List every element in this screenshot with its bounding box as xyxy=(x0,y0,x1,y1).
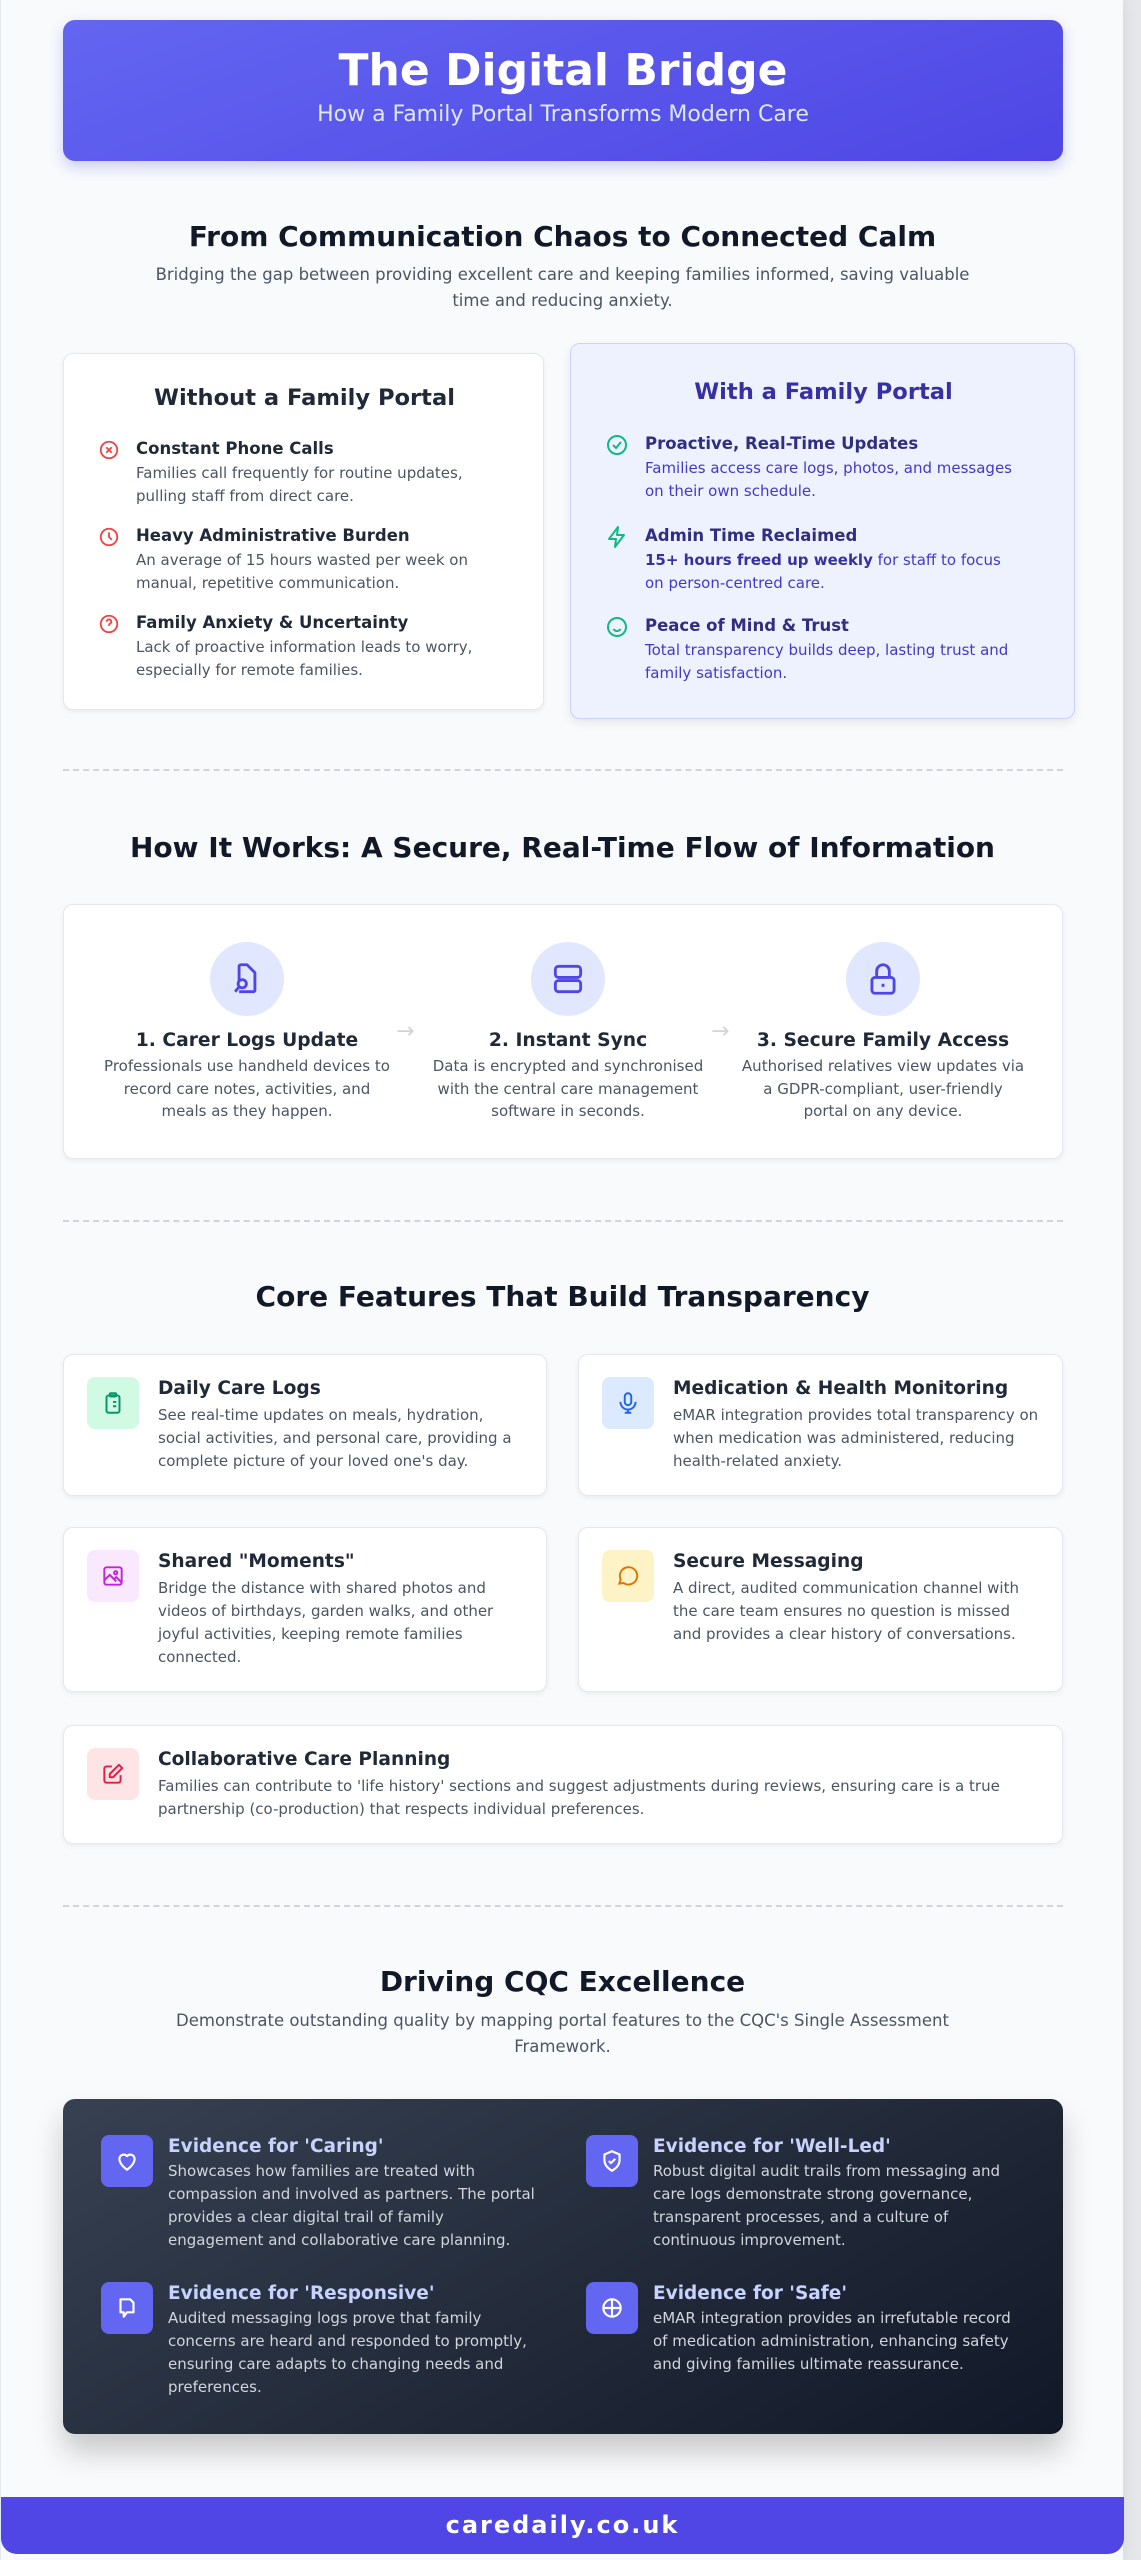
step 2 xyxy=(433,942,703,1120)
item: peace of mind xyxy=(607,616,1008,682)
step 1: Professionals use handheld devices to record care notes, activities, and meals as they happen. xyxy=(104,1057,390,1120)
item: admin time: 15+ hours freed up weekly for staff to focus xyxy=(645,551,1001,569)
title: The Digital Bridge xyxy=(339,45,787,96)
intro text: Bridging the gap between providing excellent care and keeping families informed, saving valuable time and reducing anxiety. xyxy=(156,265,969,310)
item: phone calls: Constant Phone Calls xyxy=(136,439,334,458)
feature: daily care logs xyxy=(63,1354,547,1496)
item: anxiety xyxy=(100,613,472,679)
heading: without: Without a Family Portal xyxy=(154,385,455,411)
item: admin time xyxy=(608,526,1001,592)
icon: pie xyxy=(586,2282,638,2334)
feature: secure messaging: Secure Messaging xyxy=(673,1551,864,1572)
icon: server xyxy=(531,942,605,1016)
evidence: caring xyxy=(101,2135,535,2249)
evidence: caring: provides a clear digital trail of family engagement and collaborative care planning. xyxy=(168,2208,510,2249)
feature: collaborative care planning: Families can contribute to 'life history' sections and suggest adjustments during reviews, ensuring care is a true partnership (co-production) that respects individual preferences. xyxy=(158,1777,1000,1818)
item: admin time: Admin Time Reclaimed xyxy=(645,526,857,545)
item: peace of mind: Total transparency builds deep, lasting trust and family satisfaction. xyxy=(645,641,1008,682)
heading: with: With a Family Portal xyxy=(694,379,953,405)
item: phone calls xyxy=(100,439,463,505)
feature: secure messaging: A direct, audited communication channel with the care team ensures no question is missed and provides a clear history of conversations. xyxy=(673,1579,1019,1643)
arrow 2: → xyxy=(711,1019,729,1044)
step 1: 1. Carer Logs Update xyxy=(136,1030,358,1051)
panel: with portal xyxy=(570,343,1075,719)
step 3: Authorised relatives view updates via a GDPR-compliant, user-friendly portal on any device. xyxy=(742,1057,1024,1120)
icon: device log xyxy=(210,942,284,1016)
feature: medication: Medication & Health Monitoring xyxy=(673,1378,1008,1399)
feature: secure messaging xyxy=(578,1527,1063,1692)
feature: shared moments: Bridge the distance with shared photos and videos of birthdays, garden walks, and other joyful activities, keeping remote families connected. xyxy=(158,1579,493,1666)
icon: clipboard xyxy=(87,1377,139,1429)
evidence: responsive: Evidence for 'Responsive' xyxy=(168,2283,434,2304)
footer: caredaily.co.uk xyxy=(446,2511,679,2539)
item: anxiety: Family Anxiety & Uncertainty xyxy=(136,613,408,632)
step 2: Data is encrypted and synchronised with the central care management software in seconds. xyxy=(433,1057,703,1120)
icon: lock xyxy=(846,942,920,1016)
evidence: responsive: Audited messaging logs prove that family concerns are heard and responded to promptly, ensuring care adapts to changing needs and preferences. xyxy=(168,2309,527,2396)
item: real-time updates xyxy=(607,434,1012,500)
item: peace of mind: Peace of Mind & Trust xyxy=(645,616,849,635)
feature: medication xyxy=(578,1354,1063,1496)
evidence: well-led: Robust digital audit trails from messaging and care logs demonstrate strong governance, transparent processes, and a culture of continuous improvement. xyxy=(653,2162,1000,2249)
icon: chat xyxy=(602,1550,654,1602)
step 2: 2. Instant Sync xyxy=(489,1030,647,1051)
arrow 1: → xyxy=(396,1019,414,1044)
panel: CQC evidence xyxy=(63,2099,1063,2434)
step 1 xyxy=(104,942,390,1120)
item: admin burden: Heavy Administrative Burden xyxy=(136,526,410,545)
icon: message xyxy=(101,2282,153,2334)
heading: CQC excellence: Driving CQC Excellence xyxy=(380,1965,745,1998)
icon: mic xyxy=(602,1377,654,1429)
feature: medication: eMAR integration provides total transparency on when medication was administered, reducing health-related anxiety. xyxy=(673,1406,1038,1470)
feature: daily care logs: See real-time updates on meals, hydration, social activities, and personal care, providing a complete picture of your loved one's day. xyxy=(158,1406,512,1470)
feature: shared moments: Shared "Moments" xyxy=(158,1551,355,1572)
evidence: safe: eMAR integration provides an irrefutable record of medication administration, enhancing safety and giving families ultimate reassurance. xyxy=(653,2309,1011,2373)
item: anxiety: Lack of proactive information leads to worry, especially for remote families. xyxy=(136,638,472,679)
step 3: 3. Secure Family Access xyxy=(757,1030,1009,1051)
item: admin burden: An average of 15 hours wasted per week on manual, repetitive communication. xyxy=(136,551,468,592)
icon: edit xyxy=(87,1748,139,1800)
heading: how it works: How It Works: A Secure, Real-Time Flow of Information xyxy=(130,831,995,864)
feature: shared moments xyxy=(63,1527,547,1692)
evidence: safe xyxy=(586,2282,1011,2373)
header banner xyxy=(63,20,1063,161)
feature: collaborative care planning: Collaborative Care Planning xyxy=(158,1749,450,1770)
step 3 xyxy=(742,942,1024,1120)
evidence: caring: Showcases how families are treated with compassion and involved as partners. The portal xyxy=(168,2162,535,2203)
subtitle: How a Family Portal Transforms Modern Care xyxy=(317,102,809,127)
heading: chaos to calm: From Communication Chaos to Connected Calm xyxy=(189,220,936,253)
item: admin burden xyxy=(100,526,468,592)
heading: core features: Core Features That Build Transparency xyxy=(256,1280,869,1313)
evidence: responsive xyxy=(101,2282,527,2396)
panel: without portal xyxy=(63,353,544,710)
item: real-time updates: Proactive, Real-Time Updates xyxy=(645,434,918,453)
evidence: well-led xyxy=(586,2135,1000,2249)
item: real-time updates: Families access care logs, photos, and messages on their own schedule. xyxy=(645,459,1012,500)
CQC intro text: Demonstrate outstanding quality by mapping portal features to the CQC's Single Assessment Framework. xyxy=(176,2011,949,2056)
item: admin time: on person-centred care. xyxy=(645,574,825,592)
feature: collaborative care planning xyxy=(63,1725,1063,1844)
feature: daily care logs: Daily Care Logs xyxy=(158,1378,321,1399)
evidence: caring: Evidence for 'Caring' xyxy=(168,2136,384,2157)
icon: heart xyxy=(101,2135,153,2187)
evidence: safe: Evidence for 'Safe' xyxy=(653,2283,847,2304)
item: phone calls: Families call frequently for routine updates, pulling staff from direct care. xyxy=(136,464,463,505)
evidence: well-led: Evidence for 'Well-Led' xyxy=(653,2136,891,2157)
footer xyxy=(1,2497,1124,2554)
panel: flow xyxy=(63,904,1063,1159)
icon: shield xyxy=(586,2135,638,2187)
icon: photo xyxy=(87,1550,139,1602)
